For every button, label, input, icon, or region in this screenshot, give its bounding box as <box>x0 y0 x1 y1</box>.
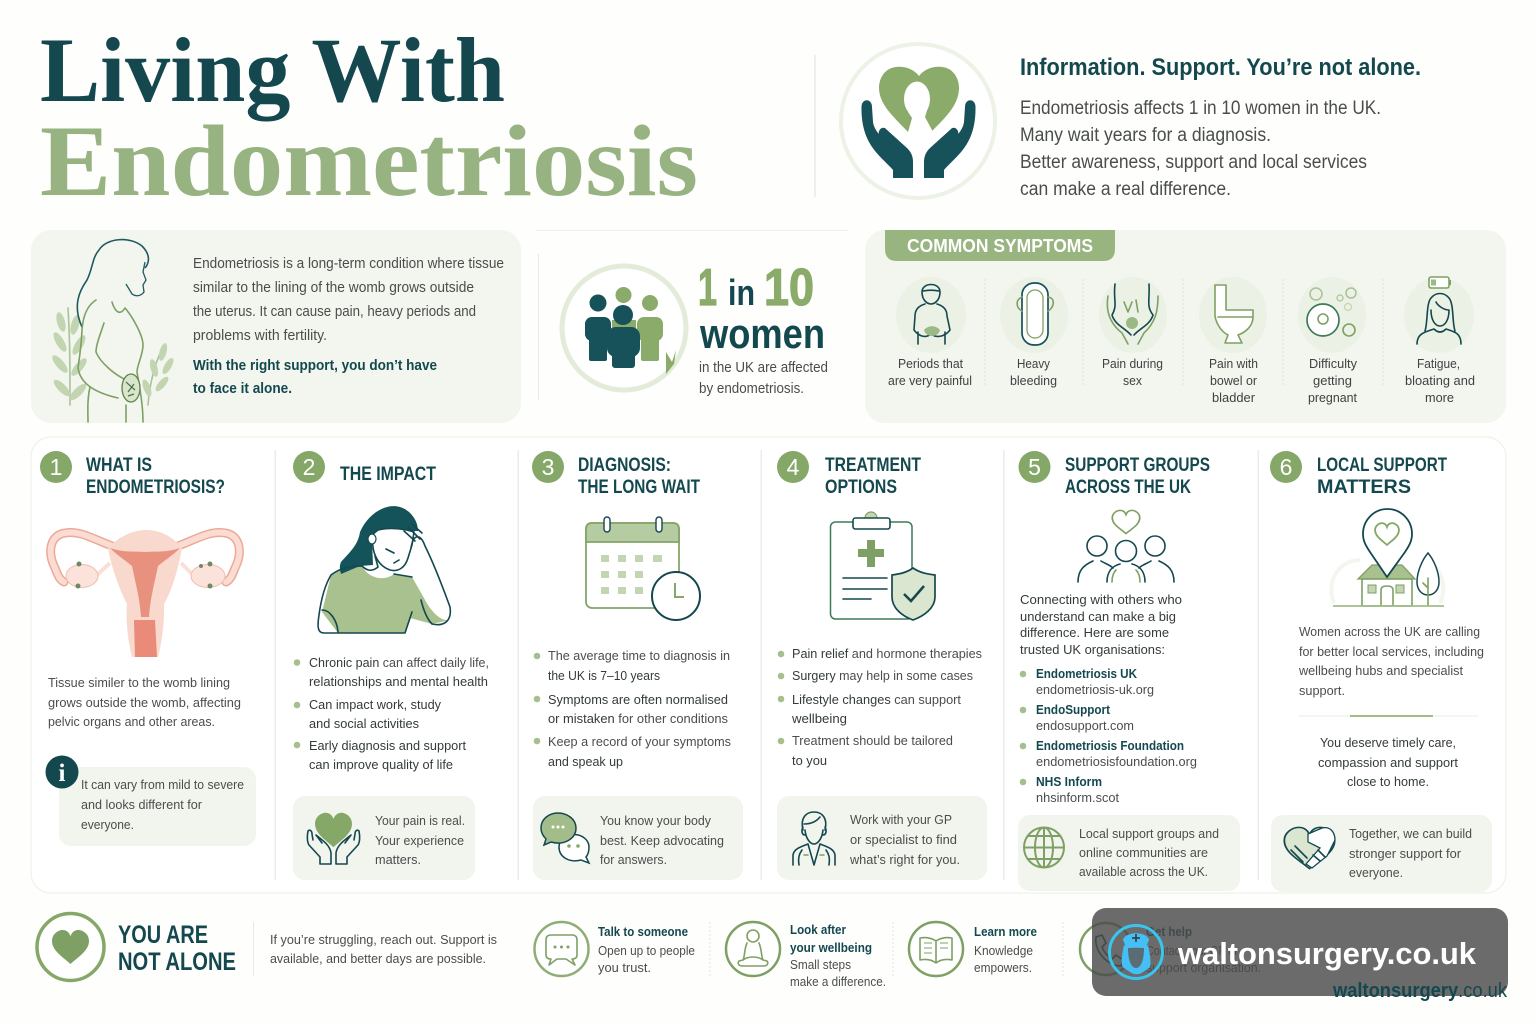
panel: definition <box>31 230 521 423</box>
card: work with your GP: or specialist to find <box>850 832 957 847</box>
bullet list: The average time to diagnosis in <box>548 648 730 663</box>
heading: 4 <box>787 454 800 480</box>
description: wellbeing hubs and specialist <box>1298 663 1463 678</box>
bullet list: Early diagnosis and support <box>309 738 466 753</box>
closing message: compassion and support <box>1318 755 1458 770</box>
label: getting <box>1313 374 1352 388</box>
heading: THE IMPACT <box>340 464 436 485</box>
bullet list: Pain relief and hormone therapies <box>792 646 982 661</box>
symptom: heavy bleeding <box>1000 277 1068 388</box>
heading: LOCAL SUPPORT <box>1317 455 1447 476</box>
bullet list: and social activities <box>309 716 419 731</box>
card: your pain is real: Your pain is real. <box>375 813 465 828</box>
description: support. <box>1299 683 1345 698</box>
bullet list <box>534 648 731 769</box>
tip: learn more <box>909 922 1037 976</box>
description: for better local services, including <box>1299 644 1484 659</box>
organisations list: NHS Inform <box>1036 774 1102 789</box>
label: Periods that <box>898 357 964 371</box>
label: pregnant <box>1308 391 1358 405</box>
heading: 6 <box>1280 454 1292 480</box>
symptom: painful periods <box>888 277 972 388</box>
big number: in <box>728 272 755 313</box>
icon: heart badge <box>37 914 104 980</box>
label <box>888 357 972 388</box>
organisations list: Endometriosis UK <box>1036 666 1138 681</box>
bullet list: can improve quality of life <box>309 757 453 772</box>
tip: look after your wellbeing: Small steps <box>790 958 851 972</box>
tip: learn more: empowers. <box>974 961 1032 975</box>
card: together <box>1271 815 1492 892</box>
definition text: Endometriosis is a long-term condition where tissue <box>193 256 504 272</box>
icon: three people and heart <box>1078 510 1174 582</box>
closing message: close to home. <box>1347 774 1429 789</box>
icon: calendar and clock <box>586 517 700 620</box>
icon: location pin and house <box>1331 509 1444 606</box>
column 4: treatment <box>777 451 987 880</box>
big number: women <box>699 310 825 357</box>
intro text: trusted UK organisations: <box>1020 642 1165 657</box>
label <box>1209 357 1258 405</box>
card: work with your GP: what’s right for you. <box>849 852 960 867</box>
icon: woman holding abdomen with plants <box>50 240 176 422</box>
card: work with your GP: Work with your GP <box>850 812 952 827</box>
bullet list: Can impact work, study <box>309 697 441 712</box>
column 6: local support <box>1270 451 1492 892</box>
heading: MATTERS <box>1317 477 1411 498</box>
column 5: support groups <box>1018 451 1240 891</box>
header intro text: Endometriosis affects 1 in 10 women in the UK. <box>1020 98 1381 119</box>
tip: get help: support organisation. <box>1146 961 1261 975</box>
label: Difficulty <box>1309 357 1358 371</box>
closing message <box>1318 735 1458 789</box>
card: work with your GP <box>777 796 987 880</box>
bullet list: Chronic pain can affect daily life, <box>309 655 489 670</box>
callout: varies: It can vary from mild to severe <box>81 777 244 792</box>
bullet list: Treatment should be tailored <box>792 733 953 748</box>
definition text: the uterus. It can cause pain, heavy periods and <box>193 304 476 320</box>
title: Endometriosis <box>40 105 698 218</box>
symptom: pain during sex <box>1099 277 1167 388</box>
callout: varies <box>46 756 256 846</box>
card: together: Together, we can build <box>1349 826 1472 841</box>
heading: DIAGNOSIS: <box>578 455 671 476</box>
column 2: the impact <box>293 451 489 880</box>
organisations list: Endometriosis Foundation <box>1036 738 1184 753</box>
bullet list: relationships and mental health <box>309 674 488 689</box>
tip: look after your wellbeing: Look after <box>790 923 846 937</box>
label: Fatigue, <box>1417 357 1460 371</box>
card: your pain is real: matters. <box>375 852 421 867</box>
symptom: pain with bowel or bladder <box>1199 277 1267 405</box>
title: Living With <box>40 19 505 121</box>
bullet list: Surgery may help in some cases <box>792 668 973 683</box>
big number <box>698 259 828 397</box>
tip: look after your wellbeing: your wellbeing <box>790 941 872 955</box>
bullet list: wellbeing <box>791 711 847 726</box>
card: you know your body: best. Keep advocating <box>600 833 724 848</box>
tip: get help <box>1080 923 1261 975</box>
header intro text <box>1020 54 1421 200</box>
label: bleeding <box>1010 374 1057 388</box>
callout: varies: and looks different for <box>81 797 203 812</box>
organisations list: endometriosis-uk.org <box>1036 682 1154 697</box>
heading: TREATMENT <box>825 455 921 476</box>
card: together: everyone. <box>1349 865 1403 880</box>
icon: clipboard and shield <box>830 512 935 620</box>
closing message: You deserve timely care, <box>1320 735 1456 750</box>
footer heading: YOU ARE <box>118 921 208 949</box>
heading <box>532 451 700 498</box>
label: Pain during <box>1102 357 1163 371</box>
label: bladder <box>1212 391 1255 405</box>
card: local support groups <box>1018 815 1240 891</box>
heading <box>293 451 436 485</box>
organisations list: nhsinform.scot <box>1036 790 1119 805</box>
bullet list: and speak up <box>548 754 623 769</box>
symptom: difficulty getting pregnant <box>1298 277 1366 405</box>
tip: look after your wellbeing <box>726 922 886 989</box>
bullet list: Symptoms are often normalised <box>548 692 728 707</box>
heading <box>40 451 225 498</box>
tip: look after your wellbeing: make a difference. <box>790 975 886 989</box>
column 3: diagnosis <box>532 451 743 880</box>
bullet list <box>778 646 982 768</box>
description <box>48 675 241 729</box>
card: local support groups: online communities are <box>1079 845 1208 860</box>
header intro text: Information. Support. You’re not alone. <box>1020 54 1421 81</box>
description: pelvic organs and other areas. <box>48 714 215 729</box>
definition text <box>193 256 504 397</box>
tip: learn more: Learn more <box>974 925 1037 939</box>
icon: hands holding heart <box>841 44 995 198</box>
footer heading: NOT ALONE <box>118 948 236 976</box>
big number: 1 <box>698 259 717 317</box>
heading <box>1018 451 1210 498</box>
description: Tissue similer to the womb lining <box>48 675 230 690</box>
tip: talk to someone: Open up to people <box>598 944 695 958</box>
bullet list: to you <box>792 753 827 768</box>
organisations list: endosupport.com <box>1036 718 1134 733</box>
card: you know your body: You know your body <box>600 813 711 828</box>
card: you know your body <box>533 796 743 880</box>
icon: woman with headache <box>318 506 450 633</box>
label: more <box>1425 391 1454 405</box>
icon: uterus diagram <box>51 530 239 657</box>
card: you know your body: for answers. <box>600 852 667 867</box>
definition text: similar to the lining of the womb grows outside <box>193 280 474 296</box>
callout: varies: everyone. <box>81 817 134 832</box>
organisations list: endometriosisfoundation.org <box>1036 754 1197 769</box>
heading: common symptoms <box>885 230 1115 261</box>
label: are very painful <box>888 374 972 388</box>
header intro text: Many wait years for a diagnosis. <box>1020 125 1271 146</box>
description: grows outside the womb, affecting <box>48 695 241 710</box>
footer message <box>270 932 497 966</box>
label: Heavy <box>1017 357 1051 371</box>
heading: SUPPORT GROUPS <box>1065 455 1210 476</box>
heading: 1 <box>50 454 62 480</box>
tip: talk to someone: Talk to someone <box>598 925 688 939</box>
heading: 3 <box>542 454 554 480</box>
footer message: available, and better days are possible. <box>270 951 486 966</box>
heading <box>777 451 921 498</box>
panel: common symptoms <box>865 230 1506 423</box>
definition text: to face it alone. <box>193 381 292 397</box>
watermark banner: waltonsurgery.co.uk <box>1177 936 1477 971</box>
tip: get help: Contact your GP or <box>1146 944 1238 958</box>
header intro text: Better awareness, support and local services <box>1020 152 1367 173</box>
intro text: understand can make a big <box>1020 609 1176 624</box>
card: local support groups: available across the UK. <box>1079 864 1208 879</box>
label <box>1308 357 1358 405</box>
intro text: Connecting with others who <box>1020 592 1182 607</box>
tip: get help: Get help <box>1146 925 1192 939</box>
label: Pain with <box>1209 357 1258 371</box>
tip: learn more: Knowledge <box>974 944 1033 958</box>
column 1: what is endometriosis <box>40 451 256 846</box>
description <box>1298 624 1484 698</box>
heading: OPTIONS <box>825 477 897 498</box>
big number: in the UK are affected <box>699 360 828 376</box>
bullet list: Keep a record of your symptoms <box>548 734 731 749</box>
description: Women across the UK are calling <box>1299 624 1480 639</box>
definition text: With the right support, you don’t have <box>193 358 437 374</box>
tip: talk to someone: you trust. <box>598 961 651 975</box>
footer message: If you’re struggling, reach out. Support is <box>270 932 497 947</box>
label: bowel or <box>1210 374 1257 388</box>
label <box>1010 357 1057 388</box>
footer heading <box>118 921 236 976</box>
panel: six-column main section <box>31 437 1506 893</box>
footer: you are not alone <box>37 914 1261 989</box>
heading: THE LONG WAIT <box>578 477 700 498</box>
site address: waltonsurgery.co.uk <box>1332 980 1508 1002</box>
label <box>1405 357 1475 405</box>
title <box>40 19 698 218</box>
organisations list <box>1020 666 1197 805</box>
icon: nurse logo <box>1110 926 1162 978</box>
card: local support groups: Local support groups and <box>1079 826 1219 841</box>
intro text <box>1020 592 1182 657</box>
big number: 10 <box>764 259 814 317</box>
heading: ACROSS THE UK <box>1065 477 1191 498</box>
symptom: fatigue and bloating <box>1404 277 1475 405</box>
label <box>1102 357 1163 388</box>
heading: WHAT IS <box>86 455 152 476</box>
tip: talk to someone <box>534 922 695 976</box>
icon: group of people <box>562 266 686 390</box>
card: together: stronger support for <box>1349 846 1462 861</box>
heading: common symptoms: COMMON SYMPTOMS <box>907 236 1093 256</box>
bullet list <box>294 655 489 772</box>
big number: by endometriosis. <box>699 381 804 397</box>
bullet list: or mistaken for other conditions <box>548 711 728 726</box>
bullet list: Lifestyle changes can support <box>792 692 961 707</box>
callout: varies: i <box>59 760 66 787</box>
label: bloating and <box>1405 374 1475 388</box>
header intro text: can make a real difference. <box>1020 179 1231 200</box>
statistic: 1 in 10 women <box>562 259 828 397</box>
heading: ENDOMETRIOSIS? <box>86 477 225 498</box>
card: your pain is real <box>293 796 475 880</box>
label: sex <box>1123 374 1143 388</box>
bullet list: the UK is 7–10 years <box>548 668 660 683</box>
organisations list: EndoSupport <box>1036 702 1111 717</box>
intro text: difference. Here are some <box>1020 625 1169 640</box>
heading <box>1270 451 1447 498</box>
heading: 2 <box>303 454 315 480</box>
card: your pain is real: Your experience <box>375 833 464 848</box>
watermark banner <box>1092 908 1508 996</box>
heading: 5 <box>1028 454 1041 480</box>
definition text: problems with fertility. <box>193 328 327 344</box>
